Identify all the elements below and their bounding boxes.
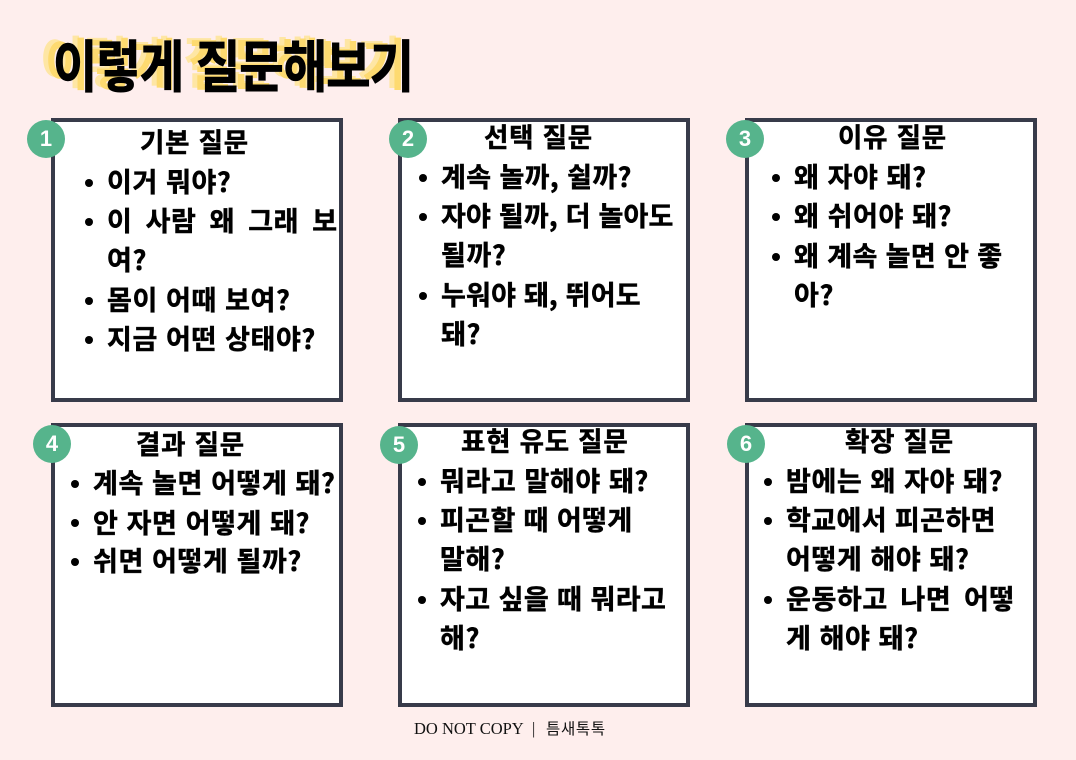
list: 기본 질문 (85, 161, 338, 357)
list: 기본 질문: 몸이 어때 보여? (107, 279, 290, 318)
list: 이유 질문: 아? (794, 274, 834, 313)
list: 결과 질문: 쉬면 어떻게 될까? (93, 540, 302, 579)
list: 이유 질문: 왜 계속 놀면 안 좋 (794, 235, 1003, 274)
title: 이렇게 질문해보기 (53, 23, 413, 104)
list: 확장 질문: 게 해야 돼? (786, 617, 919, 656)
heading: 확장 질문: 확장 질문 (845, 420, 954, 459)
list: 표현 유도 질문: 피곤할 때 어떻게 (440, 499, 633, 538)
panel: 선택 질문 (398, 118, 690, 402)
badge 1: 1 (40, 126, 52, 151)
footer (414, 717, 606, 739)
list: 선택 질문: 자야 될까, 더 놀아도 (441, 195, 674, 234)
heading: 이유 질문: 이유 질문 (838, 116, 947, 155)
list: 결과 질문: 계속 놀면 어떻게 돼? (93, 462, 336, 501)
list: 선택 질문: 될까? (441, 234, 506, 273)
list: 이유 질문 (772, 156, 1003, 313)
list: 기본 질문: 지금 어떤 상태야? (107, 318, 316, 357)
badge 4: 4 (46, 431, 58, 456)
list: 확장 질문: 운동하고 나면 어떻 (786, 578, 1015, 617)
list: 결과 질문 (71, 462, 336, 579)
list: 표현 유도 질문: 해? (440, 617, 480, 656)
panel: 확장 질문 (745, 423, 1037, 707)
badge 5 (380, 426, 418, 464)
title: 이렇게 질문해보기 (40, 19, 400, 100)
badge 1 (27, 120, 65, 158)
list: 기본 질문: 여? (107, 239, 147, 278)
list: 이유 질문: 왜 쉬어야 돼? (794, 195, 952, 234)
panel: 표현 유도 질문 (398, 423, 690, 707)
badge 5: 5 (393, 432, 405, 457)
heading: 기본 질문: 기본 질문 (140, 121, 249, 160)
list: 확장 질문: 학교에서 피곤하면 (786, 499, 996, 538)
badge 4 (33, 425, 71, 463)
heading: 결과 질문: 결과 질문 (136, 423, 245, 462)
panel: 기본 질문 (51, 118, 343, 402)
list: 이유 질문: 왜 자야 돼? (794, 156, 927, 195)
list: 표현 유도 질문: 자고 싶을 때 뭐라고 (440, 578, 666, 617)
badge 3 (726, 120, 764, 158)
footer: 틈새톡톡 (546, 717, 606, 739)
list: 표현 유도 질문: 뭐라고 말해야 돼? (440, 460, 649, 499)
heading: 선택 질문: 선택 질문 (484, 116, 593, 155)
list: 확장 질문 (764, 460, 1015, 656)
list: 기본 질문: 이 사람 왜 그래 보 (107, 200, 338, 239)
footer: DO NOT COPY (414, 719, 524, 738)
badge 3: 3 (739, 126, 751, 151)
panel: 결과 질문 (51, 423, 343, 707)
list: 선택 질문: 누워야 돼, 뛰어도 (441, 274, 641, 313)
badge 6 (727, 425, 765, 463)
list: 선택 질문: 계속 놀까, 쉴까? (441, 156, 632, 195)
panel: 이유 질문 (745, 118, 1037, 402)
badge 2: 2 (402, 126, 414, 151)
footer: | (532, 719, 535, 738)
list: 확장 질문: 밤에는 왜 자야 돼? (786, 460, 1003, 499)
badge 6: 6 (740, 431, 752, 456)
badge 2 (389, 120, 427, 158)
title: 이렇게 질문해보기 (45, 21, 405, 102)
heading: 표현 유도 질문: 표현 유도 질문 (461, 420, 629, 459)
list: 확장 질문: 어떻게 해야 돼? (786, 538, 969, 577)
list: 표현 유도 질문 (418, 460, 666, 656)
list: 선택 질문: 돼? (441, 313, 481, 352)
list: 선택 질문 (419, 156, 674, 352)
list: 표현 유도 질문: 말해? (440, 538, 505, 577)
list: 결과 질문: 안 자면 어떻게 돼? (93, 502, 310, 541)
list: 기본 질문: 이거 뭐야? (107, 161, 231, 200)
